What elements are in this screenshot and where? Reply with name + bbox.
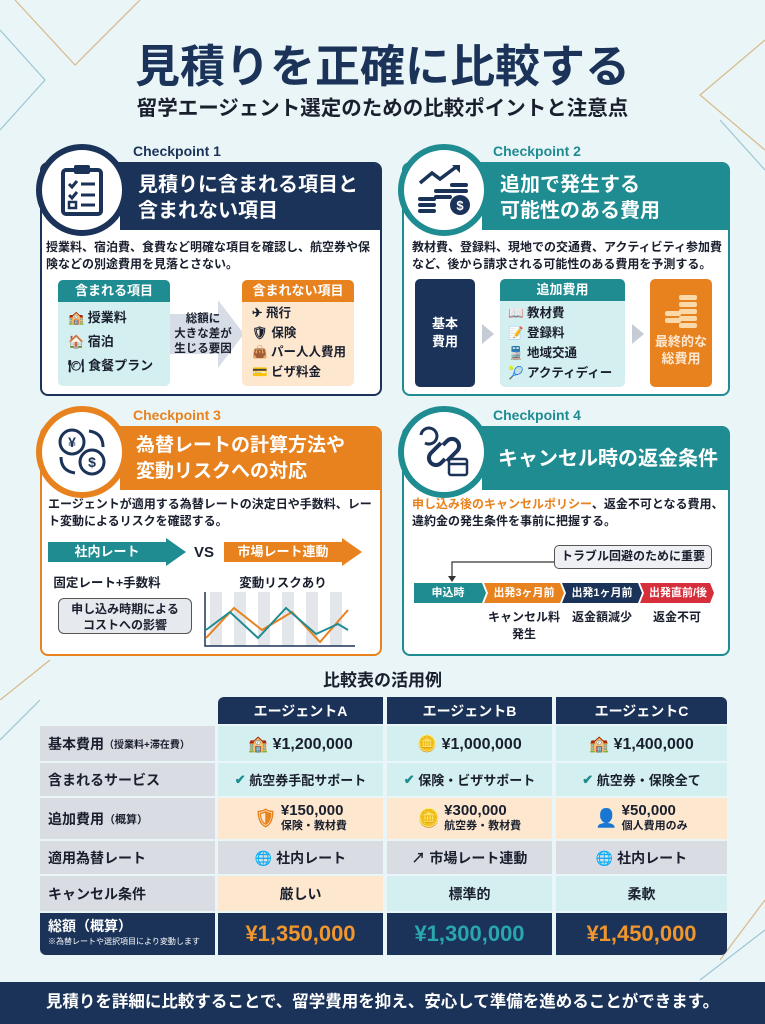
comparison table: ¥1,350,000	[245, 921, 356, 946]
icon: clipboard	[36, 144, 128, 236]
header band	[482, 164, 730, 230]
arrow: market rate: 市場レート連動	[237, 544, 328, 559]
comparison table: 航空券・教材費	[444, 820, 521, 832]
description: 教材費、登録料、現地での交通費、アクティビティ参加費など、後から請求される可能性のある費用を予測する。	[412, 240, 722, 271]
box: base cost: 基本	[432, 316, 458, 331]
description: 授業料、宿泊費、食費など明確な項目を確認し、航空券や保険などの別途費用を見落とさない。	[46, 240, 370, 271]
header row	[218, 697, 383, 724]
comparison table: 🌐 社内レート	[596, 850, 687, 866]
box: included items: 🍽 食餐プラン	[68, 358, 153, 373]
comparison table: ¥1,300,000	[414, 921, 525, 946]
timeline: キャンセル料	[488, 610, 560, 624]
panel box	[40, 426, 382, 656]
row: additional cost	[40, 798, 215, 839]
box: excluded items: 👜 パー人人費用	[252, 345, 346, 359]
panel: checkpoint 2	[398, 143, 730, 396]
comparison table: エージェントB	[423, 702, 516, 718]
row: total: 総額（概算）	[48, 918, 132, 934]
row: base cost	[40, 726, 215, 761]
comparison table: ↗ 市場レート連動	[412, 850, 527, 866]
header band	[120, 164, 382, 230]
header band: キャンセル時の返金条件	[498, 448, 718, 470]
header band: 含まれない項目	[138, 200, 278, 222]
header band: 追加で発生する	[500, 174, 640, 196]
box: additional costs: 🚆 地域交通	[508, 346, 577, 360]
panel box	[402, 162, 730, 396]
timeline: 返金不可	[653, 610, 701, 624]
comparison table	[40, 697, 727, 955]
icon: currency exchange	[36, 406, 128, 498]
comparison table: 保険・ビザサポート	[418, 773, 535, 788]
timeline: 申込時	[432, 587, 464, 599]
comparison table: ✔	[235, 772, 246, 786]
box: total cost: 最終的な	[655, 334, 707, 349]
row: included services	[40, 763, 215, 796]
row: base cost: （授業料+滞在費）	[104, 740, 190, 751]
comparison table: 🌐 社内レート	[255, 850, 346, 866]
subtitle: 留学エージェント選定のための比較ポイントと注意点	[137, 97, 628, 120]
comparison table: ¥150,000	[281, 802, 343, 819]
row: total	[40, 913, 215, 955]
callout: timing impact: コストへの影響	[83, 618, 167, 632]
box: total cost	[650, 279, 712, 387]
comparison table: エージェントC	[595, 702, 688, 718]
label: checkpoint 4: Checkpoint 4	[493, 407, 581, 423]
arrow: difference factor	[170, 300, 242, 368]
header band	[482, 428, 730, 490]
arrow: difference factor: 総額に	[186, 313, 220, 325]
label: checkpoint 3: Checkpoint 3	[133, 407, 221, 423]
header band: 変動リスクへの対応	[136, 461, 307, 482]
comparison table: 航空券手配サポート	[249, 773, 366, 788]
timeline	[414, 583, 714, 641]
callout: timing impact	[58, 598, 192, 634]
box: total cost: 総費用	[661, 351, 700, 366]
comparison table: ✔	[404, 772, 415, 786]
header band	[120, 428, 382, 490]
icon: coins with arrow	[398, 144, 490, 236]
row: exchange rate	[40, 841, 215, 874]
row: additional cost: （概算）	[104, 814, 148, 826]
box: additional costs: 🎾 アクティディー	[508, 366, 612, 380]
header band: 可能性のある費用	[500, 200, 660, 222]
box: included items: 🏫 授業料	[68, 310, 127, 325]
panel box	[40, 162, 382, 396]
box: base cost: 費用	[432, 334, 458, 349]
footer banner	[0, 982, 765, 1024]
icon: coins with arrow: $	[456, 198, 464, 213]
box: excluded items: 🛡 保険	[252, 326, 296, 340]
icon: broken link	[398, 406, 490, 498]
row: additional cost: 追加費用	[48, 810, 104, 826]
header row: エージェントA	[254, 702, 347, 718]
arrow: market rate	[224, 538, 362, 590]
callout: important: トラブル回避のために重要	[561, 549, 705, 563]
description: エージェントが適用する為替レートの決定日や手数料、レート変動によるリスクを確認する。	[48, 497, 372, 528]
arrow: market rate: 変動リスクあり	[239, 576, 327, 590]
comparison table: 個人費用のみ	[622, 820, 688, 832]
timeline: 返金額減少	[572, 610, 632, 624]
timeline: 出発3ヶ月前	[493, 587, 555, 599]
comparison table: 🪙 ¥1,000,000	[417, 736, 522, 752]
box: additional costs: 📖 教材費	[508, 306, 565, 320]
box: additional costs: 追加費用	[536, 282, 588, 297]
box: additional costs	[500, 279, 625, 387]
comparison table: 👤	[595, 808, 618, 828]
title: 見積りを正確に比較する	[135, 41, 630, 92]
panel box	[402, 426, 730, 656]
comparison table: 柔軟	[628, 886, 656, 902]
label: checkpoint 1: Checkpoint 1	[133, 143, 221, 159]
panel: checkpoint 3	[36, 406, 382, 656]
arrow: difference factor: 大きな差が	[174, 328, 232, 340]
bracket line	[448, 561, 554, 582]
box: excluded items	[242, 280, 354, 386]
box: included items	[58, 280, 170, 386]
comparison table: ✔	[582, 772, 593, 786]
arrow	[482, 324, 494, 344]
box: excluded items: 含まれない項目	[252, 283, 344, 298]
row: cancellation	[40, 876, 215, 911]
footer banner: 見積りを詳細に比較することで、留学費用を抑え、安心して準備を進めることができます。	[46, 993, 719, 1011]
box: included items: 含まれる項目	[75, 283, 153, 298]
row: base cost: 基本費用	[48, 736, 104, 752]
box: excluded items: 💳 ビザ料金	[252, 364, 321, 378]
header band: 為替レートの計算方法や	[136, 435, 345, 456]
timeline: 発生	[512, 627, 536, 641]
header band: 見積りに含まれる項目と	[138, 174, 358, 196]
row: total: ※為替レートや選択項目により変動します	[48, 937, 200, 946]
comparison table: 標準的	[448, 886, 490, 902]
row: exchange rate: 適用為替レート	[48, 850, 146, 866]
arrow: internal rate: 固定レート+手数料	[53, 576, 161, 590]
arrow: internal rate: 社内レート	[74, 544, 140, 559]
box: additional costs: 📝 登録料	[508, 326, 565, 340]
arrow	[632, 324, 644, 344]
comparison table: 🪙	[418, 808, 440, 828]
description: 申し込み後のキャンセルポリシー、返金不可となる費用、違約金の発生条件を事前に把握する。	[412, 497, 724, 528]
comparison table: 保険・教材費	[281, 820, 347, 832]
comparison table: 🏫 ¥1,200,000	[248, 736, 353, 752]
comparison table: 🏫 ¥1,400,000	[589, 736, 694, 752]
comparison table: ¥300,000	[444, 802, 507, 819]
box: included items: 🏠 宿泊	[68, 334, 114, 349]
callout: timing impact: 申し込み時期による	[71, 602, 179, 616]
label: checkpoint 2: Checkpoint 2	[493, 143, 581, 159]
box: excluded items: ✈ 飛行	[252, 306, 291, 320]
text: VS: VS	[194, 544, 214, 561]
comparison table: ¥1,450,000	[586, 921, 697, 946]
icon: currency exchange: $	[88, 454, 96, 470]
comparison table: 🛡	[254, 808, 277, 828]
arrow: internal rate	[48, 538, 186, 590]
timeline: 出発直前/後	[649, 587, 707, 599]
comparison table: 厳しい	[280, 886, 322, 902]
panel: checkpoint 4	[398, 406, 730, 656]
timeline: 出発1ヶ月前	[571, 587, 633, 599]
panel: checkpoint 1	[36, 143, 382, 396]
box: base cost	[415, 279, 475, 387]
callout: important	[554, 545, 712, 569]
icon: currency exchange: ¥	[68, 434, 76, 450]
chart: rate fluctuation	[204, 592, 355, 647]
heading: comparison table: 比較表の活用例	[323, 671, 442, 690]
row: included services: 含まれるサービス	[48, 772, 160, 788]
comparison table: 航空券・保険全て	[597, 773, 701, 788]
comparison table: ¥50,000	[622, 802, 676, 819]
arrow: difference factor: 生じる要因	[174, 343, 232, 355]
row: cancellation: キャンセル条件	[48, 886, 146, 902]
